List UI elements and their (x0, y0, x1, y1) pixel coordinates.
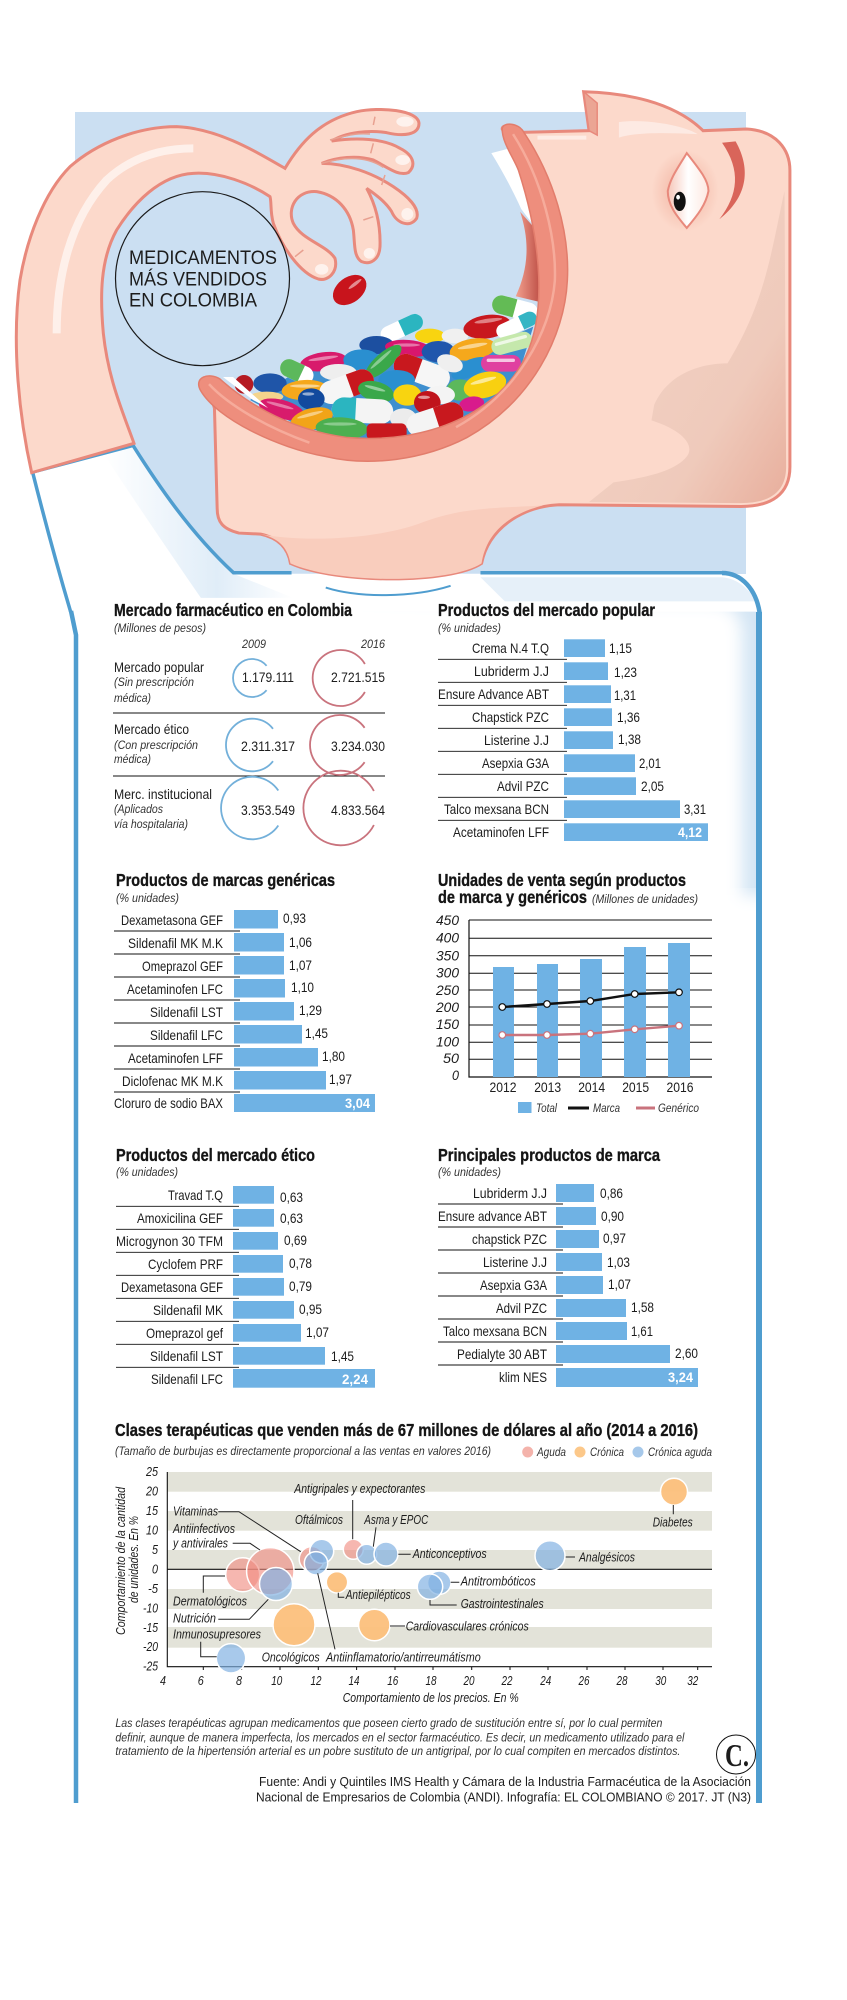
heading: (Millones de unidades) (592, 894, 698, 906)
bubble labels: Antitrombóticos (460, 1575, 536, 1589)
bar chart: Sildenafil MK (153, 1302, 224, 1318)
bar chart: 3,04 (345, 1095, 370, 1111)
bar chart: Pedialyte 30 ABT (457, 1346, 547, 1362)
title text: MÁS VENDIDOS (129, 268, 267, 291)
bar chart: chapstick PZC (472, 1231, 547, 1247)
row: Mercado ético (114, 715, 385, 775)
y axis labels: 0 (452, 1067, 459, 1083)
x axis labels: 22 (501, 1674, 513, 1688)
bar chart: Advil PZC (496, 1300, 547, 1316)
bubble labels: Diabetes (653, 1516, 693, 1530)
y axis labels: 5 (152, 1543, 158, 1557)
bar chart: 0,79 (289, 1278, 312, 1294)
bubble labels: Anticonceptivos (412, 1547, 487, 1561)
heading: Principales productos de marca (438, 1145, 660, 1165)
throat (516, 212, 545, 303)
x axis labels: 6 (198, 1674, 204, 1688)
y axis labels: 50 (443, 1050, 459, 1066)
bar chart: Dexametasona GEF (121, 1279, 223, 1295)
bar chart: Lubriderm J.J (473, 1185, 547, 1201)
row: Mercado popular: 1.179.111 (242, 669, 294, 685)
legend (518, 1102, 700, 1115)
bubble chart (114, 1465, 712, 1705)
bar chart: Sildenafil LFC (151, 1371, 223, 1387)
y axis labels: 400 (436, 930, 459, 946)
y axis labels: -5 (148, 1582, 158, 1596)
x axis labels (490, 1079, 694, 1095)
row: Mercado institucional: (Aplicados (114, 804, 163, 816)
bar chart: 0,63 (280, 1210, 303, 1226)
title text: MEDICAMENTOS (129, 247, 277, 269)
panel: Productos del mercado popular (438, 600, 708, 841)
bubbles (216, 1478, 688, 1673)
bar chart: 2,24 (342, 1371, 368, 1387)
heading: de marca y genéricos (438, 887, 587, 907)
subheading: (Tamaño de burbujas es directamente proporcional a las ventas en valores 2016) (115, 1446, 491, 1458)
subheading: (% unidades) (438, 1167, 501, 1179)
bar chart: 1,07 (608, 1276, 631, 1292)
bar chart: 1,58 (631, 1299, 654, 1315)
x axis labels: 2016 (666, 1079, 694, 1095)
x axis labels: 2013 (534, 1079, 561, 1095)
bar chart: 1,06 (289, 934, 312, 950)
panel: Principales productos de marca (438, 1145, 698, 1387)
bar chart: Sildenafil LST (150, 1348, 223, 1364)
x axis labels: 30 (655, 1674, 666, 1688)
y axis labels: 10 (146, 1523, 158, 1537)
bar chart: Ensure Advance ABT (438, 686, 549, 702)
bar chart: 0,90 (601, 1208, 624, 1224)
y axis labels: -25 (143, 1660, 158, 1674)
bar chart: Sildenafil LST (150, 1004, 223, 1020)
x axis labels: 2015 (622, 1079, 649, 1095)
leader lines (201, 1500, 673, 1657)
legend: Genérico (658, 1103, 700, 1115)
bar chart: Microgynon 30 TFM (116, 1233, 223, 1249)
x axis labels: 28 (616, 1674, 628, 1688)
x axis labels: 12 (310, 1674, 322, 1688)
bar chart: Listerine J.J (483, 1254, 547, 1270)
heading: Productos de marcas genéricas (116, 870, 335, 890)
bar chart: 1,61 (631, 1323, 653, 1339)
row: Mercado ético: Mercado ético (114, 721, 189, 737)
bubble labels: Asma y EPOC (364, 1513, 429, 1527)
x axis labels: 32 (687, 1674, 698, 1688)
background blue square (75, 112, 746, 574)
legend: Total (536, 1103, 557, 1115)
year labels: 2009 (241, 639, 267, 651)
row: Mercado popular: Mercado popular (114, 659, 204, 675)
icon: eye (651, 150, 719, 232)
explanatory note: Las clases terapéuticas agrupan medicamentos que poseen cierto grado de sustitución entre sí, por lo cual permiten (115, 1718, 662, 1730)
bar chart: Listerine J.J (484, 732, 549, 748)
title text: EN COLOMBIA (129, 290, 257, 312)
bar chart: 2,01 (639, 755, 661, 771)
x axis labels: 14 (348, 1674, 360, 1688)
x axis labels: 26 (578, 1674, 590, 1688)
panel: Unidades de venta (435, 870, 712, 1115)
bubble labels: Antiinfectivos (172, 1522, 235, 1536)
y axis labels (435, 912, 459, 1083)
y axis title: Comportamiento de la cantidad (114, 1486, 128, 1635)
bar chart: 1,03 (607, 1254, 630, 1270)
combo chart (435, 912, 712, 1115)
icon: El Colombiano logo: C. (725, 1737, 749, 1773)
bar chart: Lubriderm J.J (474, 663, 549, 679)
bubble legend: Crónica (590, 1447, 624, 1459)
bar chart: 0,78 (289, 1255, 312, 1271)
bar chart: 3,31 (684, 801, 706, 817)
y axis labels: 450 (436, 912, 459, 928)
bar chart: Cyclofem PRF (148, 1256, 223, 1272)
y axis labels: 100 (436, 1034, 459, 1050)
bar chart (438, 1184, 698, 1387)
lower teeth (223, 377, 268, 408)
explanatory note: tratamiento de la hipertensión arterial es un pobre sustituto de un antigripal, por lo cual compiten en mercados distintos. (115, 1746, 680, 1758)
row: Mercado institucional (114, 771, 385, 845)
row: Mercado institucional: 4.833.564 (331, 802, 385, 818)
subheading: (% unidades) (438, 623, 501, 635)
upper teeth (491, 148, 544, 239)
y axis labels: 15 (146, 1504, 158, 1518)
illustration: man swallowing pills (33, 445, 765, 612)
line: Genérico (499, 1022, 682, 1038)
y axis labels: -10 (143, 1601, 158, 1615)
x axis labels: 10 (271, 1674, 282, 1688)
source credit (256, 1774, 751, 1804)
row: Mercado institucional: 3.353.549 (241, 802, 295, 818)
total bars (493, 943, 690, 1077)
bar chart: Acetaminofen LFF (453, 824, 549, 840)
y axis labels (143, 1465, 158, 1674)
x axis labels (160, 1674, 698, 1688)
bar chart: Crema N.4 T.Q (472, 640, 549, 656)
shirt (33, 445, 765, 612)
y axis title (114, 1486, 141, 1635)
bar chart: 1,45 (305, 1025, 328, 1041)
subheading: (% unidades) (116, 893, 179, 905)
eyebrow (719, 141, 745, 219)
bar chart: Talco mexsana BCN (443, 1323, 547, 1339)
bar chart: 0,93 (283, 910, 306, 926)
bar chart: 0,95 (299, 1301, 322, 1317)
bubble labels: Oftálmicos (295, 1513, 343, 1527)
bar chart: 1,45 (331, 1348, 354, 1364)
legend: Marca (593, 1103, 620, 1115)
bar chart (114, 910, 375, 1112)
bar chart: 1,31 (614, 687, 636, 703)
bar chart: 0,97 (603, 1230, 626, 1246)
bubble legend (522, 1446, 712, 1459)
arm highlight (57, 148, 193, 333)
x axis labels: 16 (387, 1674, 398, 1688)
explanatory note (115, 1718, 685, 1758)
bar chart: 1,29 (299, 1002, 322, 1018)
subheading: (Millones de pesos) (114, 623, 206, 635)
bubble labels: Inmunosupresores (173, 1628, 261, 1642)
explanatory note: definir, aunque de manera imperfecta, los mercados en el sector farmacéutico. Es decir, un medicamento utilizado para el (115, 1733, 685, 1745)
bar chart: 0,63 (280, 1189, 303, 1205)
bubble labels: Antigripales y expectorantes (293, 1482, 425, 1496)
bar chart: Ensure advance ABT (438, 1208, 547, 1224)
year labels: 2016 (360, 639, 386, 651)
bar chart: 1,36 (617, 709, 640, 725)
y axis labels: 20 (145, 1484, 158, 1498)
bar chart: 1,15 (609, 640, 632, 656)
bar chart: Chapstick PZC (472, 709, 549, 725)
fingertip highlights (315, 117, 414, 275)
bar chart: Sildenafil LFC (150, 1027, 223, 1043)
row: Mercado popular: médica) (114, 693, 151, 705)
row: Mercado institucional: vía hospitalaria) (114, 819, 188, 831)
bubble labels: Vitaminas (173, 1505, 218, 1519)
bar chart: Omeprazol gef (146, 1325, 223, 1341)
bar chart: 2,60 (675, 1345, 698, 1361)
face (206, 92, 790, 579)
y axis labels: 250 (435, 982, 459, 998)
title circle (116, 192, 290, 366)
source credit: Fuente: Andi y Quintiles IMS Health y Cámara de la Industria Farmacéutica de la Asociación (259, 1774, 751, 1789)
y axis labels: 350 (436, 947, 459, 963)
infographic canvas (14, 90, 792, 1804)
heading: Clases terapéuticas que venden más de 67 millones de dólares al año (2014 a 2016) (115, 1420, 698, 1440)
bar chart: Omeprazol GEF (142, 958, 223, 974)
bar chart: 0,86 (600, 1185, 623, 1201)
subheading: (% unidades) (116, 1167, 178, 1179)
panel: Clases terapéuticas (114, 1420, 712, 1705)
bubble labels: Gastrointestinales (461, 1597, 544, 1611)
x axis title: Comportamiento de los precios. En % (343, 1691, 519, 1705)
source credit: Nacional de Empresarios de Colombia (ANDI). Infografía: EL COLOMBIANO © 2017. JT (N3) (256, 1790, 751, 1804)
y axis labels: 0 (152, 1562, 158, 1576)
y axis title: de unidades. En % (127, 1516, 141, 1603)
line: Marca (499, 989, 682, 1010)
row: Mercado popular: (Sin prescripción (114, 677, 194, 689)
bar chart: Asepxia G3A (480, 1277, 548, 1293)
row: Mercado ético: (Con prescripción (114, 740, 198, 752)
x axis labels: 4 (160, 1674, 166, 1688)
bar chart: Acetaminofen LFF (128, 1050, 223, 1066)
bar chart: Diclofenac MK M.K (122, 1073, 224, 1089)
x axis labels: 18 (426, 1674, 437, 1688)
finger creases (295, 117, 385, 257)
panel background (723, 612, 758, 902)
heading: Productos del mercado popular (438, 600, 655, 620)
heading: Mercado farmacéutico en Colombia (114, 600, 352, 620)
bar chart: 1,80 (322, 1048, 345, 1064)
bar chart: 0,69 (284, 1232, 307, 1248)
bubble labels: Antiinflamatorio/antirreumátismo (325, 1651, 481, 1665)
bar chart: klim NES (499, 1369, 547, 1385)
row: Mercado institucional: Merc. institucional (114, 786, 212, 802)
bubble labels (172, 1482, 693, 1665)
panel: Productos de marcas genéricas (114, 870, 375, 1112)
bar chart: Sildenafil MK M.K (128, 935, 224, 951)
bar chart: 1,10 (291, 979, 314, 995)
x axis labels: 20 (463, 1674, 475, 1688)
y axis labels: 300 (436, 964, 459, 980)
bubble legend: Crónica aguda (648, 1447, 712, 1459)
bar chart: Acetaminofen LFC (127, 981, 223, 997)
bar chart: Travad T.Q (168, 1187, 223, 1203)
bar chart: Talco mexsana BCN (444, 801, 549, 817)
bubble labels: Antiepilépticos (345, 1588, 411, 1602)
x axis labels: 24 (539, 1674, 551, 1688)
panel frame (71, 573, 760, 1803)
bar chart: 3,24 (668, 1369, 693, 1385)
panel frame right edge (756, 612, 762, 1803)
y axis labels: 25 (145, 1465, 158, 1479)
falling red pill (327, 269, 372, 311)
row: Mercado ético: médica) (114, 754, 151, 766)
bar chart: 2,05 (641, 778, 664, 794)
lips (199, 124, 568, 461)
x axis labels: 8 (236, 1674, 242, 1688)
title text (129, 247, 277, 312)
heading: Unidades de venta según productos (438, 870, 686, 890)
bar chart: 1,97 (329, 1071, 352, 1087)
bar chart: 1,38 (618, 731, 641, 747)
bubble labels: Nutrición (173, 1612, 216, 1626)
x axis labels: 2012 (490, 1079, 517, 1095)
pills in the mouth (235, 293, 540, 442)
bubble legend: Aguda (536, 1447, 566, 1459)
heading: Productos del mercado ético (116, 1145, 315, 1165)
year labels (241, 639, 386, 651)
panel: Productos del mercado ético (116, 1145, 375, 1388)
bar chart: 1,07 (289, 957, 312, 973)
panel: Mercado farmacéutico en Colombia (113, 600, 386, 845)
y axis labels: 200 (435, 999, 459, 1015)
heading (438, 870, 698, 907)
bubble labels: Dermatológicos (173, 1595, 247, 1609)
arm and hand (16, 109, 419, 473)
bubble labels: Cardiovasculares crónicos (406, 1620, 529, 1634)
bar chart: Amoxicilina GEF (137, 1210, 223, 1226)
row: Mercado ético: 2.311.317 (241, 738, 295, 754)
bubble labels: Analgésicos (578, 1551, 635, 1565)
bar chart: Advil PZC (497, 778, 549, 794)
bar chart: 4,12 (678, 824, 702, 840)
row: Mercado popular: 2.721.515 (331, 669, 385, 685)
row: Mercado popular (114, 650, 385, 706)
y axis labels: -20 (143, 1640, 158, 1654)
bubble labels: Oncológicos (262, 1651, 320, 1665)
bar chart: 1,07 (306, 1324, 329, 1340)
y axis labels: -15 (143, 1621, 158, 1635)
bar chart: Cloruro de sodio BAX (114, 1095, 224, 1111)
bar chart: 1,23 (614, 664, 637, 680)
y axis labels: 150 (436, 1016, 459, 1032)
bar chart (116, 1186, 375, 1388)
bar chart: Asepxia G3A (482, 755, 550, 771)
bar chart (438, 639, 708, 841)
bubble labels: y antivirales (172, 1537, 228, 1551)
x axis labels: 2014 (578, 1079, 605, 1095)
row: Mercado ético: 3.234.030 (331, 738, 385, 754)
bar chart: Dexametasona GEF (121, 912, 223, 928)
